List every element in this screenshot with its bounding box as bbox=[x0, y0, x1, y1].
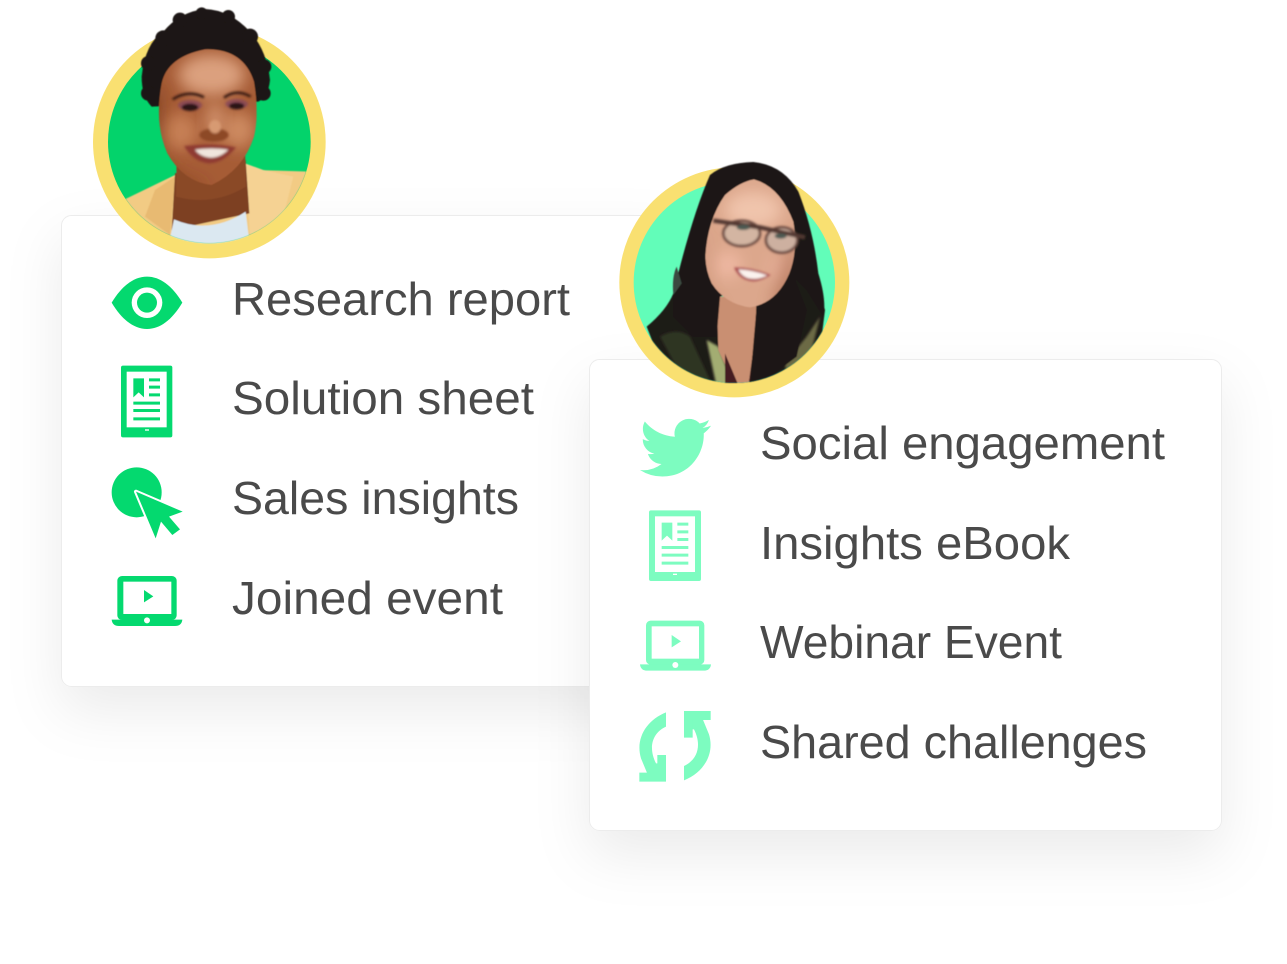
portrait: woman with glasses and long dark hair bbox=[619, 162, 849, 403]
card background bbox=[590, 360, 1222, 830]
hair bbox=[141, 7, 271, 107]
icon: laptop video bbox=[640, 621, 711, 671]
panel: first contact bbox=[62, 7, 682, 687]
icon: cursor click bbox=[112, 467, 183, 538]
face features bbox=[713, 221, 805, 281]
face bbox=[158, 48, 258, 185]
face bbox=[704, 178, 796, 308]
label: joined event: Joined event bbox=[232, 572, 503, 624]
label: sales insights: Sales insights bbox=[232, 472, 519, 524]
hair bbox=[673, 162, 824, 337]
icon: refresh arrows bbox=[639, 711, 711, 782]
rows: second contact list bbox=[639, 417, 1165, 782]
label: solution sheet: Solution sheet bbox=[232, 372, 534, 424]
label: research report: Research report bbox=[232, 273, 570, 325]
icon: twitter bird bbox=[640, 419, 711, 477]
icon: tablet document bbox=[649, 510, 701, 581]
label: webinar event: Webinar Event bbox=[760, 616, 1062, 668]
portrait: woman with short curly hair bbox=[93, 7, 326, 267]
face features bbox=[173, 93, 251, 163]
icon: tablet document bbox=[121, 366, 172, 437]
label: insights ebook: Insights eBook bbox=[760, 517, 1071, 569]
label: social engagement: Social engagement bbox=[760, 417, 1165, 469]
icon: laptop video bbox=[112, 576, 182, 626]
card background bbox=[62, 216, 682, 686]
label: shared challenges: Shared challenges bbox=[760, 716, 1147, 768]
rows: first contact list bbox=[112, 273, 570, 626]
icon: eye bbox=[112, 277, 182, 329]
panel: second contact bbox=[590, 162, 1222, 830]
